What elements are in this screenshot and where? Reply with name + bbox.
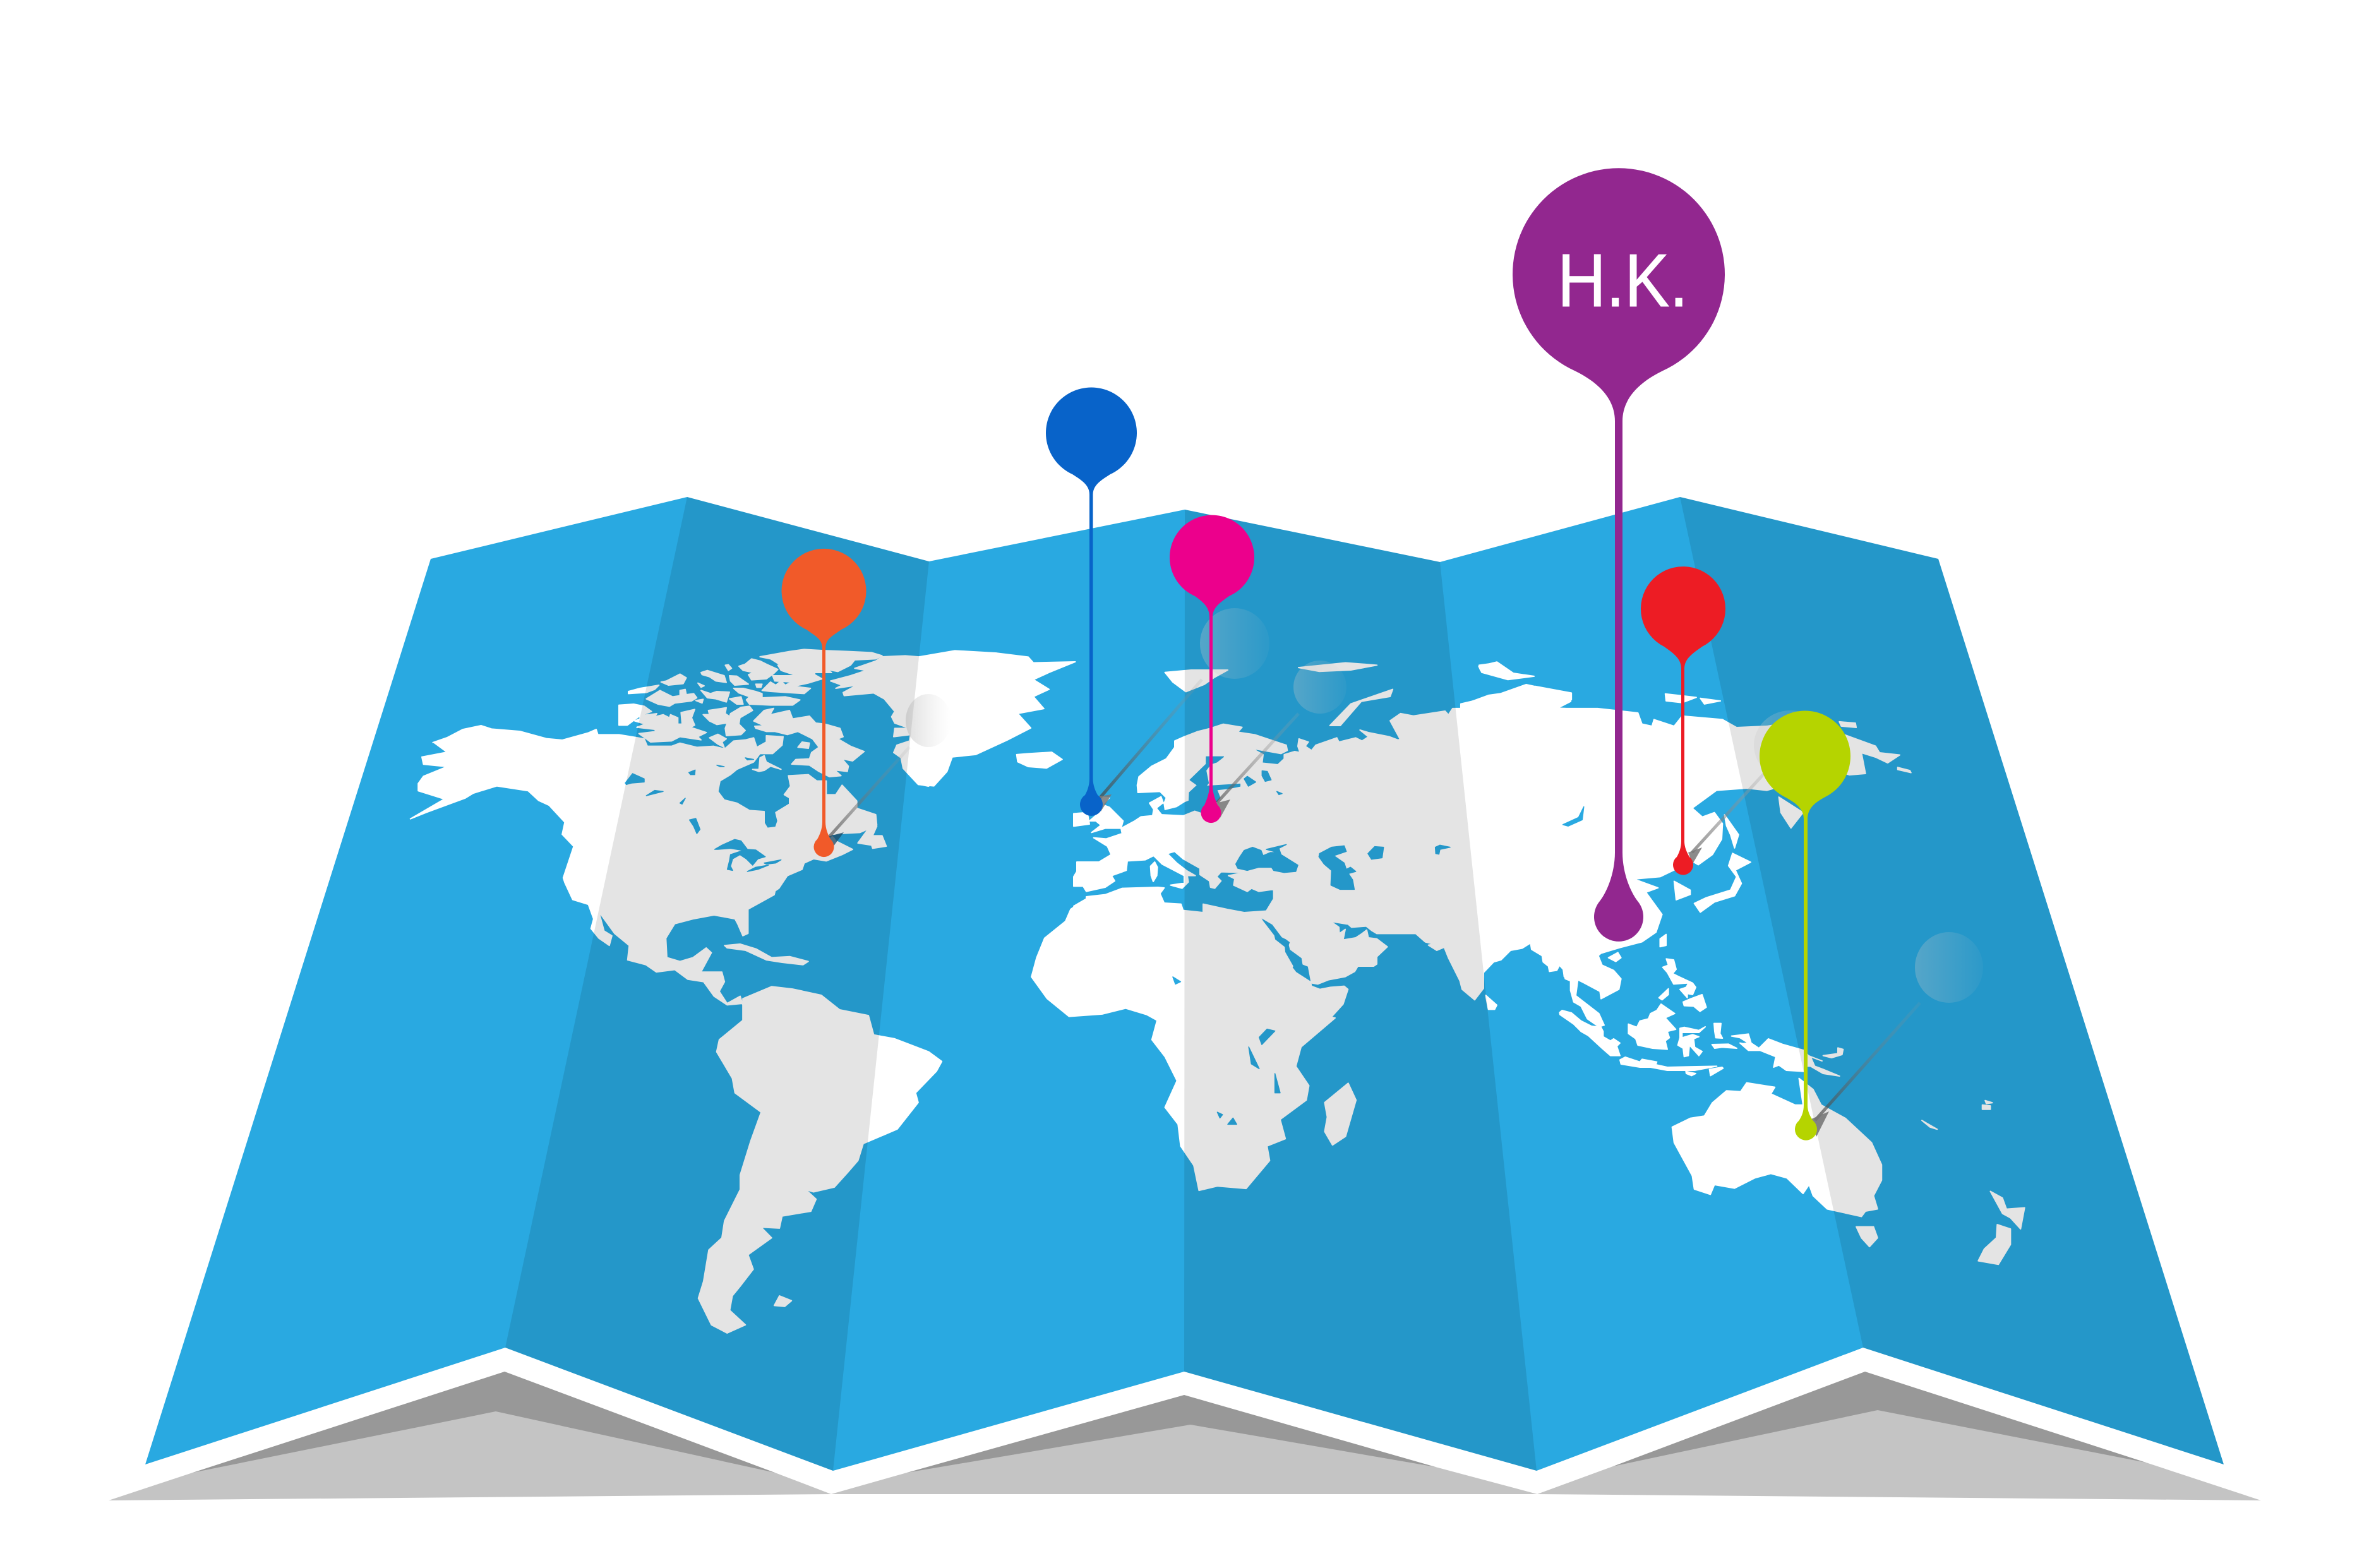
- map ground shadow: [109, 1372, 2261, 1500]
- land: Middle East and South Asia: [1260, 821, 1564, 1022]
- shaded map folds: [505, 497, 2224, 1471]
- inland seas and lakes: [625, 757, 1584, 1124]
- pin shadows: [827, 608, 1983, 1137]
- land: Americas west and south, Greenland east, Iceland: [411, 650, 1076, 1333]
- land: Europe and North Africa: [1074, 724, 1421, 1008]
- shadow: pink pin: [1216, 661, 1346, 818]
- folded map sheet: [145, 497, 2224, 1471]
- shadow: blue pin: [1096, 608, 1269, 811]
- shadow: red pin: [1688, 710, 1827, 864]
- shadow: lime pin: [1811, 932, 1983, 1137]
- pin: pink: [1170, 515, 1254, 823]
- pin: lime: [1760, 711, 1850, 1140]
- land: Southeast Asia and Indonesia: [1554, 935, 1843, 1076]
- pin: purple with H.K. label: [1513, 168, 1725, 942]
- land: Canada, Arctic archipelago and west Greenland: [598, 649, 947, 890]
- pin: orange: [782, 549, 867, 857]
- shadow: orange pin: [827, 694, 951, 849]
- label: H.K.: H.K.: [1557, 239, 1688, 323]
- land: Africa south, Siberia and Arctic islands: [1031, 662, 1571, 1190]
- world map land: [411, 649, 2025, 1333]
- pin: red: [1641, 566, 1725, 875]
- land: East Asia and Pacific: [1436, 662, 2025, 1264]
- pin: blue: [1046, 388, 1137, 816]
